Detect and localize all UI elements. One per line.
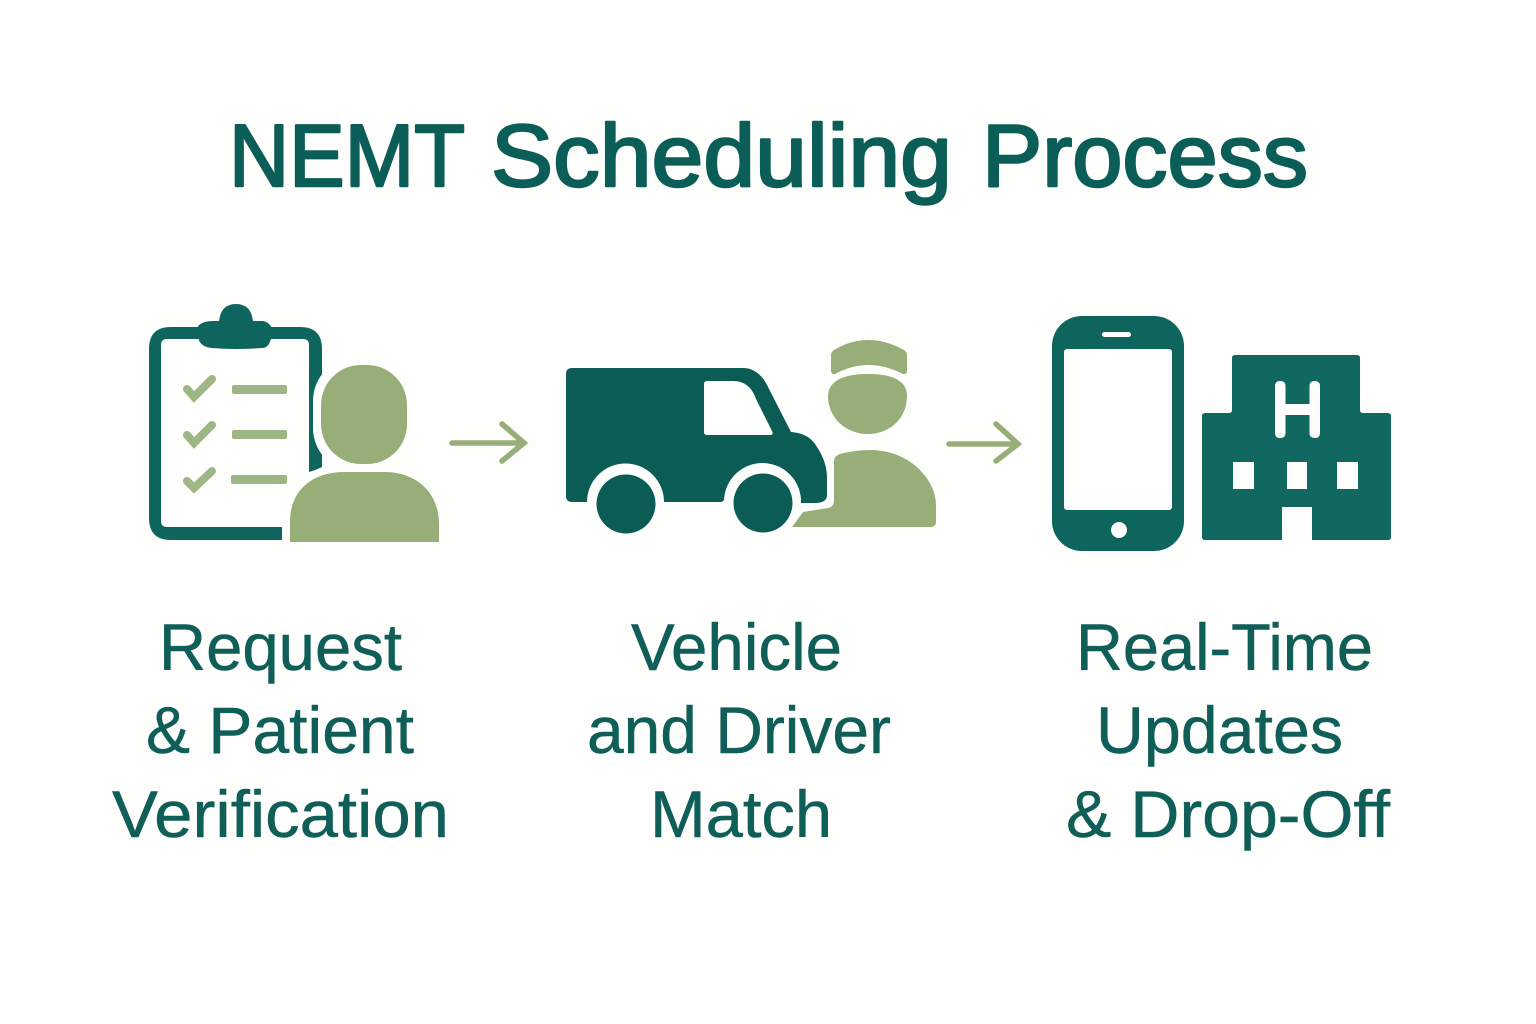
step label: vehicle and driver match: and Driver bbox=[587, 693, 891, 767]
panel: step 1 request and patient verification bbox=[112, 304, 449, 851]
step label: vehicle and driver match: Vehicle bbox=[631, 610, 842, 684]
icon: van bbox=[566, 368, 827, 534]
title: NEMT bbox=[229, 106, 465, 205]
step label: request and patient verification bbox=[112, 610, 449, 851]
step label: request and patient verification: Verification bbox=[112, 777, 449, 851]
step label: request and patient verification: & Patient bbox=[146, 693, 414, 767]
step label: real-time updates and drop-off bbox=[1066, 610, 1391, 851]
panel: step 2 vehicle and driver match bbox=[566, 340, 936, 851]
title bbox=[229, 106, 1308, 205]
icon: smartphone bbox=[1052, 316, 1184, 551]
step label: vehicle and driver match bbox=[587, 610, 891, 851]
icon: clipboard checklist bbox=[149, 304, 322, 540]
step label: real-time updates and drop-off: Real-Time bbox=[1076, 610, 1373, 684]
icon: patient bbox=[290, 357, 439, 542]
step label: real-time updates and drop-off: Updates bbox=[1096, 693, 1343, 767]
icon: hospital bbox=[1202, 355, 1391, 540]
icon: driver bbox=[792, 340, 936, 527]
arrow: step 1 to step 2 bbox=[452, 424, 524, 461]
title: Scheduling bbox=[491, 106, 952, 205]
title: Process bbox=[982, 106, 1308, 205]
arrow: step 2 to step 3 bbox=[949, 424, 1018, 461]
step label: vehicle and driver match: Match bbox=[650, 777, 832, 851]
panel: step 3 real-time updates and drop-off bbox=[1052, 316, 1391, 851]
step label: real-time updates and drop-off: & Drop-Off bbox=[1066, 777, 1391, 851]
step label: request and patient verification: Request bbox=[159, 610, 402, 684]
